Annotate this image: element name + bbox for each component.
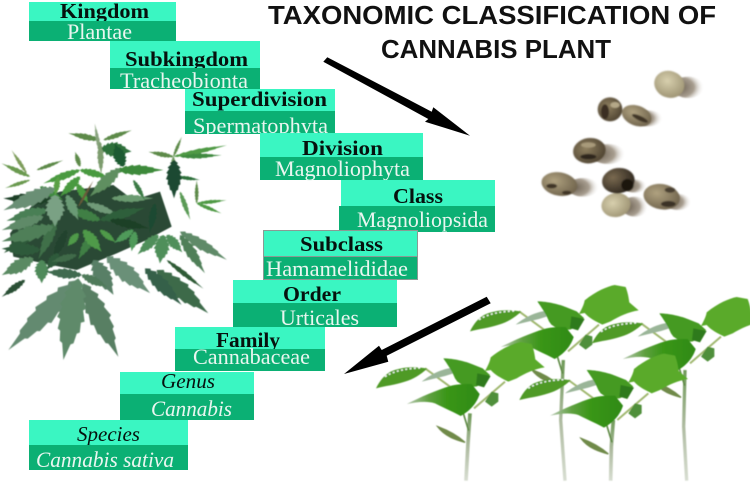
photo: mature cannabis plant: [0, 123, 230, 362]
rank: species: [29, 420, 188, 472]
rank: class: Class: [393, 184, 443, 208]
rank: family: [175, 327, 325, 371]
rank: subkingdom: Subkingdom: [125, 47, 249, 71]
rank: subclass: Subclass: [300, 232, 383, 256]
rank: kingdom: [29, 0, 176, 44]
rank: order: Urticales: [280, 305, 359, 330]
title: CANNABIS PLANT: [381, 34, 611, 64]
rank: division: [260, 133, 423, 181]
rank: order: Order: [283, 282, 341, 306]
rank: genus: Genus: [161, 369, 215, 393]
title: TAXONOMIC CLASSIFICATION OF: [268, 0, 716, 30]
rank: class: Magnoliopsida: [357, 207, 488, 232]
rank: superdivision: Superdivision: [192, 87, 327, 111]
rank: division: Magnoliophyta: [275, 156, 410, 181]
seed bodies: [540, 67, 688, 219]
rank: division: Division: [302, 136, 383, 160]
photo: row of young seedlings: [376, 285, 750, 481]
rank: subkingdom: [110, 41, 260, 93]
rank: genus: Cannabis: [151, 396, 232, 421]
rank: class: [339, 180, 495, 232]
rank: species: Species: [77, 422, 140, 446]
rank: family: Family: [216, 328, 280, 352]
arrow: towards seeds: [323, 57, 470, 136]
rank: subclass: Hamamelididae: [266, 256, 408, 281]
rank: species: Cannabis sativa: [36, 447, 174, 472]
rank: superdivision: [185, 89, 335, 134]
arrow: towards family rank: [344, 297, 491, 374]
seed shadows: [567, 77, 704, 217]
rank: kingdom: Plantae: [67, 19, 132, 44]
rank: subkingdom: Tracheobionta: [120, 68, 248, 93]
rank: order: [233, 280, 397, 330]
rank: subclass: [264, 230, 418, 281]
title: [268, 0, 716, 64]
photo: cannabis seeds: [540, 67, 704, 219]
rank: family: Cannabaceae: [193, 344, 310, 369]
rank: genus: [120, 369, 254, 421]
rank: superdivision: Spermatophyta: [193, 113, 328, 138]
